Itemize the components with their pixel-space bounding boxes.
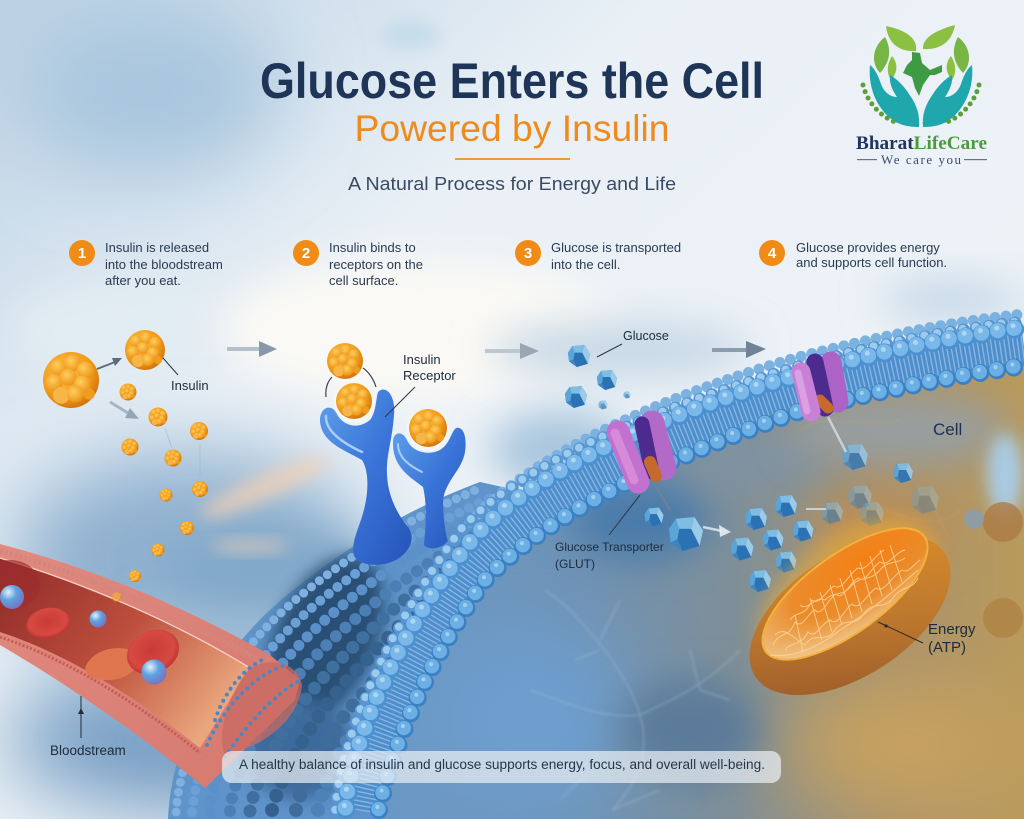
subtitle: Powered by Insulin [354,108,670,149]
logo: BharatLifeCare [856,25,987,167]
step 2 [293,240,427,288]
glucose transporter 1 [615,423,664,482]
insulin receptor left [320,389,412,565]
title: Glucose Enters the Cell [260,53,764,109]
label: insulin receptor [385,352,456,417]
step 1: into the bloodstream [105,257,223,272]
hydrophobic tails [362,347,1024,811]
step 3: 3 [524,245,532,262]
logo tagline: We care you [881,152,962,167]
arrow: step 3 to 4 [712,341,766,358]
logo laurels [863,85,979,123]
insulin receptor right [393,428,466,548]
neuron-like filaments [530,395,960,810]
step 4: Glucose provides energy [796,240,940,255]
label: bloodstream [50,696,126,758]
membrane bilayer [335,314,1024,811]
upper front beads [344,324,1024,809]
label: insulin receptor: Receptor [403,368,456,383]
step 3: Glucose is transported [551,240,681,255]
label: insulin [163,358,209,393]
label: glucose transporter: (GLUT) [555,557,595,571]
step 3 [515,240,685,272]
arrow: step 1 to 2 [227,341,277,357]
label: insulin receptor: Insulin [403,352,441,367]
label: energy ATP: (ATP) [928,639,966,656]
glucose molecules outside [565,345,630,410]
step 1: 1 [78,245,86,262]
step 4 [759,240,947,270]
callout: healthy balance: A healthy balance of insulin and glucose supports energy, focus, and overall well-being. [239,757,765,772]
insulin release arrows [97,358,200,476]
label: insulin: Insulin [171,378,209,393]
label: glucose [597,329,669,357]
insulin molecules [43,330,449,602]
binding arcs [326,368,376,397]
blue spheres [0,585,166,684]
vessel end netted in surface [207,660,302,757]
step 1: Insulin is released [105,240,209,255]
cell surface: bumpy outer mass [168,482,560,819]
lower beads [378,363,1024,810]
glucose transporter 2 [798,362,838,412]
step 4: and supports cell function. [796,255,947,270]
logo wordmark: BharatLifeCare [856,133,987,154]
tagline: A Natural Process for Energy and Life [348,174,676,194]
label: glucose transporter: Glucose Transporter [555,540,664,554]
label: glucose: Glucose [623,329,669,343]
red blood cells [0,560,186,682]
glucose movement arrows [655,417,846,537]
back bead rows [335,314,1024,811]
step 1 [69,240,226,288]
logo tagline [857,152,987,167]
step 1: after you eat. [105,273,181,288]
label: energy ATP [878,621,976,656]
logo leaves [874,25,969,80]
cell interior [378,366,1024,819]
glucose molecules inside [644,444,939,592]
step 4: 4 [768,245,777,262]
bloodstream vessel [0,544,302,788]
step 2: receptors on the [329,257,423,272]
label: cell: Cell [933,420,962,439]
orange vesicles [964,502,1023,638]
label: bloodstream: Bloodstream [50,743,126,758]
step 2: cell surface. [329,273,398,288]
step 3: into the cell. [551,257,620,272]
logo hands [870,65,972,127]
callout: healthy balance [222,751,781,783]
mitochondrion: energy [722,486,978,728]
membrane backing band [362,347,1024,811]
label: glucose transporter [555,495,664,571]
logo India map [903,52,942,96]
arrow: step 2 to 3 [485,343,539,359]
step 2: Insulin binds to [329,240,416,255]
label: energy ATP: Energy [928,621,976,638]
step 2: 2 [302,245,310,262]
